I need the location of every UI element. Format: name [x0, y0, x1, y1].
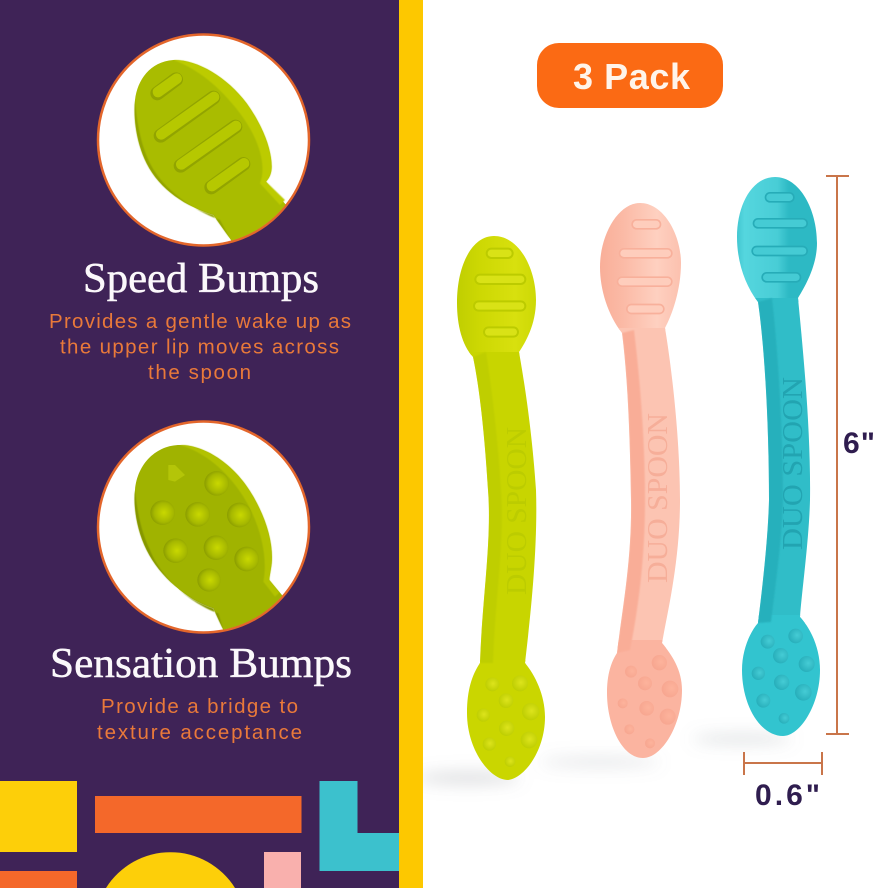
text: speed bumps description [49, 310, 351, 384]
spoon: teal [737, 177, 820, 736]
badge: 3 Pack: 3 Pack [573, 56, 691, 97]
dimension: 6 inch height: 6" [843, 427, 875, 460]
panel: purple sidebar [0, 0, 399, 888]
dimension: 6 inch height [826, 176, 875, 734]
embossed label: DUO SPOON (teal): DUO SPOON [777, 377, 809, 550]
spoon: green [457, 236, 545, 780]
decorative colour blocks [0, 781, 399, 888]
heading: Speed Bumps: Speed Bumps [83, 256, 319, 302]
text: speed bumps description: the upper lip moves across [60, 336, 339, 358]
yellow divider strip [399, 0, 423, 888]
spoon: pink [600, 203, 682, 758]
badge: 3 Pack [537, 43, 723, 108]
circle: speed bumps close-up [98, 34, 309, 253]
dimension: 0.6 inch width: 0.6" [755, 779, 820, 812]
dimension: 0.6 inch width [744, 752, 822, 812]
embossed label: DUO SPOON (pink): DUO SPOON [642, 413, 674, 583]
text: sensation bumps description [97, 695, 302, 744]
circle: sensation bumps close-up [98, 422, 309, 640]
text: speed bumps description: the spoon [148, 361, 251, 384]
heading: Sensation Bumps: Sensation Bumps [50, 641, 352, 687]
spoon shadows [416, 735, 792, 784]
text: sensation bumps description: texture acceptance [97, 721, 302, 744]
text: sensation bumps description: Provide a bridge to [101, 695, 298, 718]
text: speed bumps description: Provides a gentle wake up as [49, 310, 351, 333]
embossed label: DUO SPOON (green): DUO SPOON [501, 427, 533, 595]
